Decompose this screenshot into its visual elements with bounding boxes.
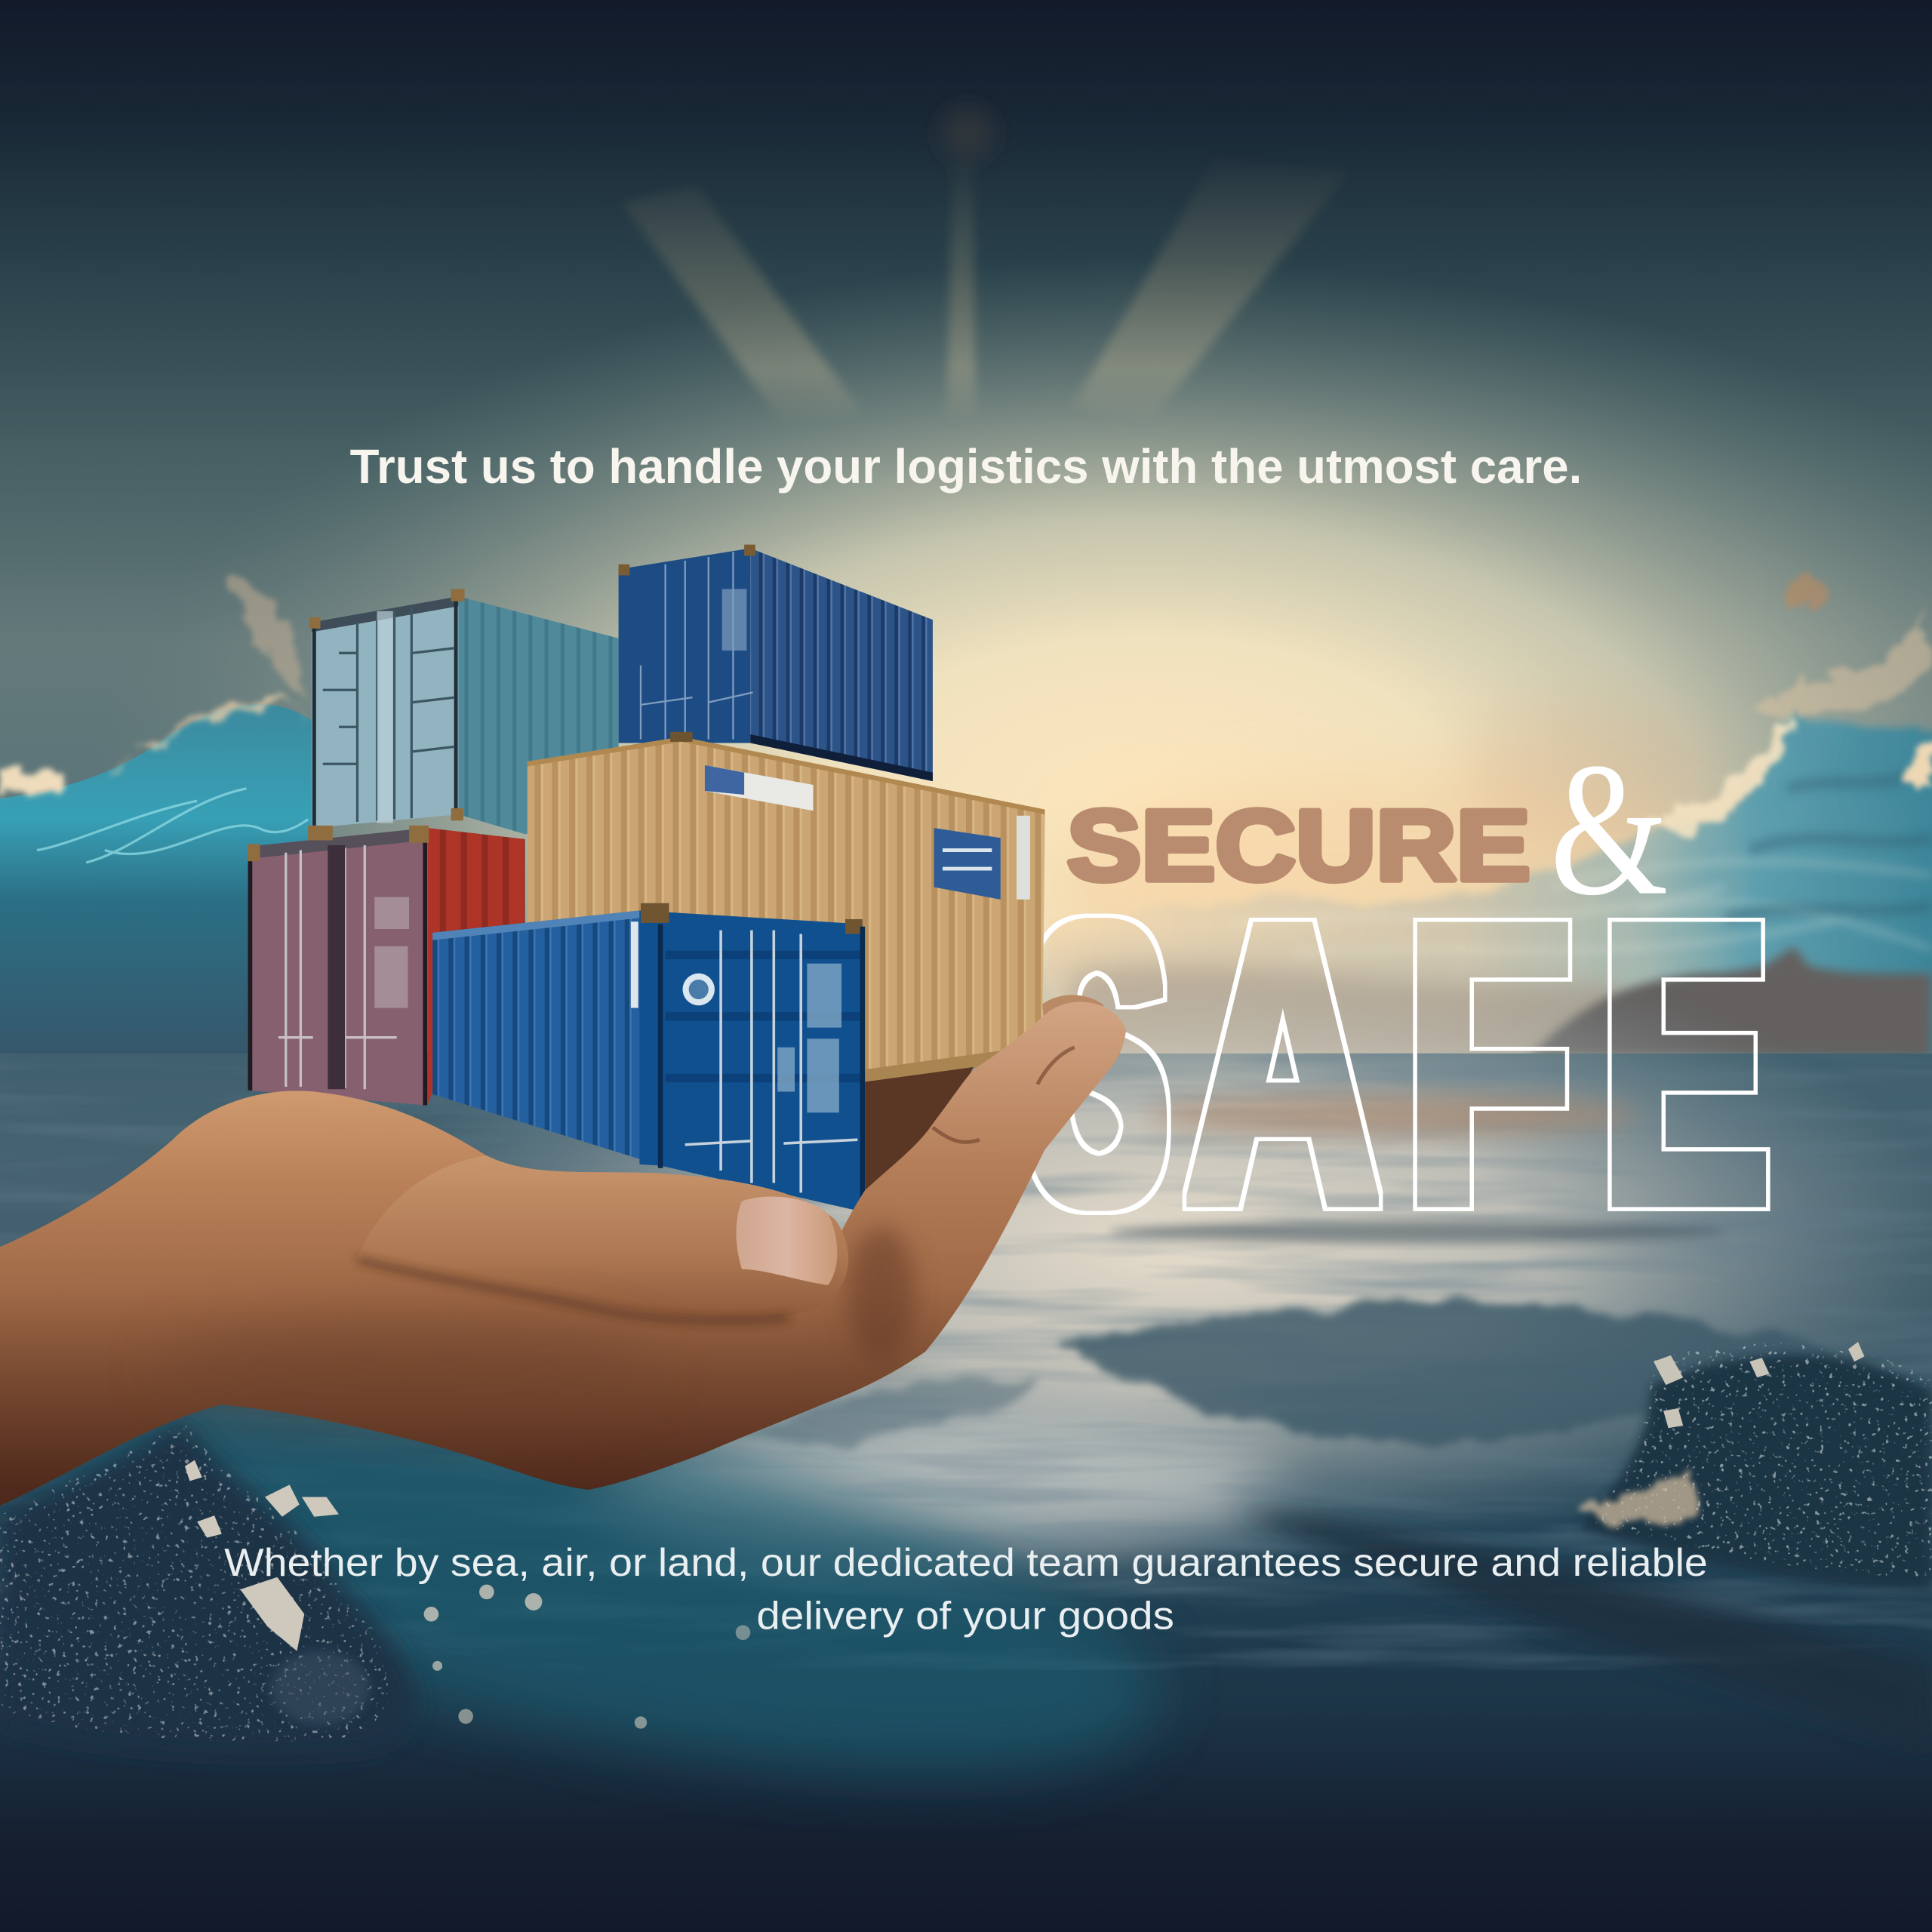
background: sea: [0, 924, 1932, 1932]
heading: SAFE outline: E: [1601, 842, 1769, 1286]
spray: bottom left rock: [0, 1423, 750, 1755]
container: red side and mauve door: [248, 826, 525, 1105]
hand: crease under thumb: [357, 1260, 789, 1321]
container: blue front: [432, 903, 865, 1213]
text: description: Whether by sea, air, or land, our dedicated team guarantees secure and reliable: [224, 1541, 1708, 1585]
wave: left: [0, 573, 320, 1060]
hand: palm shading: [160, 1318, 653, 1417]
sun rays: [622, 109, 1349, 431]
background: sky: [0, 0, 1932, 1343]
spray: bottom right rock: [1577, 1342, 1932, 1589]
heading: SAFE outline: A: [1186, 842, 1379, 1287]
hand: [0, 995, 1126, 1506]
hand: thumb: [357, 1155, 848, 1319]
text: description: delivery of your goods: [756, 1594, 1174, 1638]
hand: palm shadow beside thumb: [847, 1226, 915, 1361]
hand: finger crease: [933, 1048, 1075, 1142]
heading: ampersand: &: [1550, 723, 1669, 935]
container: navy top: [619, 545, 933, 781]
container: tan long: [528, 732, 1044, 1084]
hand: main arm and palm: [0, 1091, 925, 1506]
hand: second finger: [1042, 995, 1115, 1060]
containers stack: [248, 545, 1044, 1213]
wave: right and warm swell: [1048, 578, 1932, 1060]
hand: inner palm shadow: [865, 1067, 974, 1214]
heading: SECURE: SECURE: [1067, 790, 1531, 902]
hand: index finger: [789, 1001, 1126, 1417]
heading: SAFE outline: F: [1406, 841, 1571, 1286]
hand: thumb nail: [737, 1197, 837, 1285]
heading: SAFE outline: [1028, 841, 1769, 1287]
text: description: [224, 1541, 1708, 1638]
heading: SAFE outline: S: [1028, 842, 1168, 1286]
container: teal upper left: [309, 589, 619, 834]
text: tagline: Trust us to handle your logistics with the utmost care.: [350, 440, 1582, 494]
